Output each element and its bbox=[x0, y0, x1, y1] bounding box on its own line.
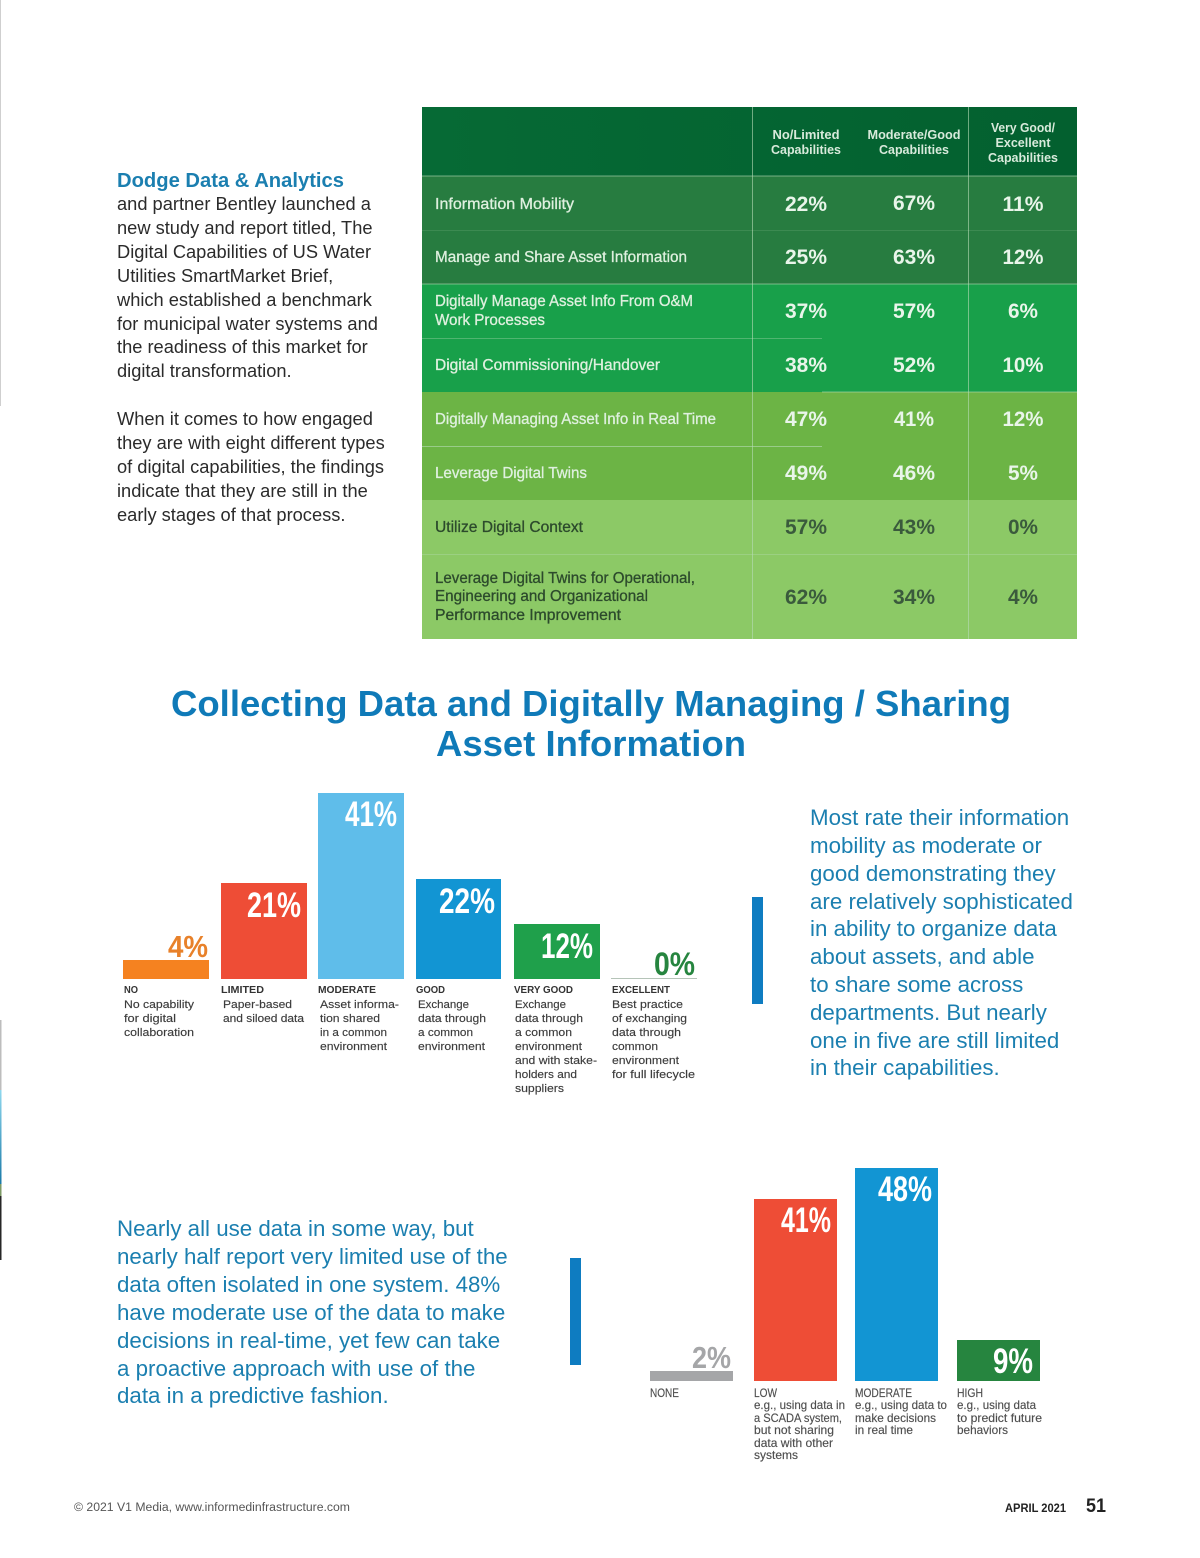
bar: Good 22%: GOOD bbox=[416, 984, 445, 996]
row: Information Mobility: 22% bbox=[785, 193, 827, 216]
bar: Moderate 41%: in a common bbox=[320, 1027, 387, 1039]
bar: Low 41%: but not sharing bbox=[754, 1423, 834, 1437]
bar: Good 22%: a common bbox=[418, 1027, 473, 1039]
row: Leverage Digital Twins for Operational: Leverage Digital Twins for Operational, bbox=[435, 570, 695, 587]
bar: Good 22%: Exchange bbox=[418, 999, 469, 1011]
callout: information mobility: are relatively sophisticated bbox=[810, 889, 1073, 914]
intro paragraph 2: they are with eight different types bbox=[117, 432, 385, 453]
bar: High 9%: e.g., using data bbox=[957, 1398, 1036, 1412]
main title: Asset Information bbox=[436, 723, 746, 764]
main title bbox=[171, 683, 1011, 764]
bar: None 2%: 2% bbox=[692, 1340, 731, 1375]
row: Manage and Share Asset Information: 12% bbox=[1002, 246, 1044, 269]
bar: Excellent 0%: 0% bbox=[654, 946, 695, 982]
intro paragraph 2 bbox=[117, 408, 385, 525]
bar: High 9% bbox=[957, 1340, 1042, 1437]
row: Digital Commissioning/Handover: 52% bbox=[893, 354, 935, 377]
bar: Excellent 0%: common bbox=[612, 1041, 658, 1053]
bar: No 4%: 4% bbox=[168, 929, 208, 964]
bar: Low 41%: systems bbox=[754, 1448, 798, 1462]
intro paragraph 1: and partner Bentley launched a bbox=[117, 193, 372, 214]
footer date: APRIL 2021 bbox=[1005, 1501, 1066, 1515]
bar: Low 41%: 41% bbox=[781, 1201, 831, 1240]
row: Leverage Digital Twins for Operational: 4% bbox=[1008, 586, 1038, 609]
bar: Moderate 48%: e.g., using data to bbox=[855, 1398, 947, 1412]
bar: High 9%: behaviors bbox=[957, 1423, 1008, 1437]
intro paragraph 1: digital transformation. bbox=[117, 360, 292, 381]
intro paragraph 2: of digital capabilities, the findings bbox=[117, 456, 384, 477]
row: Leverage Digital Twins for Operational bbox=[422, 554, 1077, 639]
row: Information Mobility: Information Mobility bbox=[435, 196, 574, 213]
row: Digital Commissioning/Handover: Digital Commissioning/Handover bbox=[435, 357, 660, 374]
row: Digitally Manage Asset Info: 6% bbox=[1008, 300, 1038, 323]
bar: Excellent 0%: of exchanging bbox=[612, 1013, 687, 1025]
row: Information Mobility bbox=[422, 176, 1077, 230]
table header row: Moderate/Good bbox=[868, 128, 960, 142]
row: Leverage Digital Twins for Operational: 62% bbox=[785, 586, 827, 609]
intro paragraph 1: Digital Capabilities of US Water bbox=[117, 241, 371, 262]
bar: High 9%: 9% bbox=[993, 1342, 1033, 1381]
bar: Low 41%: data with other bbox=[754, 1436, 833, 1450]
bar: Very Good 12%: holders and bbox=[515, 1069, 577, 1081]
callout: data use: Nearly all use data in some way, but bbox=[117, 1216, 475, 1241]
row: Manage and Share Asset Information: 25% bbox=[785, 246, 827, 269]
bar: No 4%: collaboration bbox=[124, 1027, 194, 1039]
intro paragraph 1: Utilities SmartMarket Brief, bbox=[117, 265, 333, 286]
row: Manage and Share Asset Information: Manage and Share Asset Information bbox=[435, 249, 687, 266]
callout: information mobility: in their capabilities. bbox=[810, 1055, 1000, 1080]
bar: No 4%: No capability bbox=[124, 999, 194, 1011]
table header row: Capabilities bbox=[879, 143, 949, 157]
row: Leverage Digital Twins for Operational: Engineering and Organizational bbox=[435, 588, 648, 605]
table header row: Excellent bbox=[996, 136, 1051, 150]
page edge strip bbox=[0, 0, 2, 1260]
bar: Moderate 41%: MODERATE bbox=[318, 984, 376, 996]
bar: Low 41%: e.g., using data in bbox=[754, 1398, 845, 1412]
bar: Very Good 12%: Exchange bbox=[515, 999, 566, 1011]
row: Digitally Manage Asset Info: 37% bbox=[785, 300, 827, 323]
callout: data use: have moderate use of the data to make bbox=[117, 1300, 505, 1325]
bar: Low 41%: a SCADA system, bbox=[754, 1411, 842, 1425]
bar: No 4% bbox=[123, 929, 209, 1039]
callout: information mobility: in ability to organize data bbox=[810, 916, 1057, 941]
bar: Excellent 0% bbox=[611, 946, 697, 1081]
bar: Excellent 0%: environment bbox=[612, 1055, 680, 1067]
bar chart: data use bbox=[650, 1168, 1042, 1462]
bar: Moderate 41% bbox=[318, 793, 404, 1053]
table header row: Very Good/ bbox=[991, 121, 1056, 135]
bar: Very Good 12%: environment bbox=[515, 1041, 583, 1053]
bar: Moderate 41%: 41% bbox=[345, 795, 397, 834]
table header row: No/Limited bbox=[772, 128, 840, 142]
callout: data use: data in a predictive fashion. bbox=[117, 1383, 389, 1408]
bar: Low 41%: LOW bbox=[754, 1386, 778, 1400]
row: Utilize Digital Context: 57% bbox=[785, 516, 827, 539]
bar: No 4%: for digital bbox=[124, 1013, 176, 1025]
bar: Moderate 48%: in real time bbox=[855, 1423, 913, 1437]
bar: Excellent 0%: data through bbox=[612, 1027, 681, 1039]
row: Utilize Digital Context: Utilize Digital Context bbox=[435, 519, 584, 536]
bar: Very Good 12%: and with stake- bbox=[515, 1055, 597, 1067]
bar: Good 22%: 22% bbox=[439, 882, 495, 921]
row: Leverage Digital Twins bbox=[422, 446, 1077, 500]
row: Digital Commissioning/Handover bbox=[422, 338, 1077, 392]
callout: information mobility: to share some across bbox=[810, 972, 1023, 997]
row: Manage and Share Asset Information bbox=[422, 230, 1077, 284]
row: Leverage Digital Twins: Leverage Digital Twins bbox=[435, 465, 587, 482]
row: Information Mobility: 67% bbox=[893, 192, 935, 215]
intro paragraph 2: indicate that they are still in the bbox=[117, 480, 368, 501]
row: Digitally Managing Asset Info in Real Time bbox=[422, 392, 1077, 446]
main title: Collecting Data and Digitally Managing / Sharing bbox=[171, 683, 1011, 724]
table header row: Capabilities bbox=[771, 143, 841, 157]
bar: Excellent 0%: EXCELLENT bbox=[612, 984, 671, 996]
bar: Good 22% bbox=[416, 879, 501, 1053]
bar: Excellent 0%: Best practice bbox=[612, 999, 683, 1011]
row: Manage and Share Asset Information: 63% bbox=[893, 246, 935, 269]
bar chart: information mobility bbox=[123, 793, 697, 1095]
bar: Low 41% bbox=[754, 1199, 845, 1462]
callout: data use bbox=[117, 1216, 508, 1408]
callout: information mobility: mobility as moderate or bbox=[810, 833, 1042, 858]
bar: None 2% bbox=[650, 1340, 733, 1400]
bar: Limited 21%: LIMITED bbox=[221, 984, 264, 996]
intro paragraph 1: the readiness of this market for bbox=[117, 336, 368, 357]
row: Utilize Digital Context: 43% bbox=[893, 516, 935, 539]
bar: Good 22%: data through bbox=[418, 1013, 486, 1025]
row: Digitally Managing Asset Info in Real Time: 47% bbox=[785, 408, 827, 431]
bar: Very Good 12%: data through bbox=[515, 1013, 583, 1025]
row: Digitally Manage Asset Info: Digitally Manage Asset Info From O&M bbox=[435, 293, 693, 310]
row: Information Mobility: 11% bbox=[1002, 193, 1044, 216]
callout: information mobility: Most rate their information bbox=[810, 805, 1069, 830]
bar: Moderate 41%: tion shared bbox=[320, 1013, 380, 1025]
bar: Limited 21%: Paper-based bbox=[223, 999, 292, 1011]
bar: No 4%: NO bbox=[124, 984, 138, 996]
callout: information mobility: about assets, and able bbox=[810, 944, 1035, 969]
bar: Very Good 12% bbox=[514, 924, 600, 1095]
row: Digitally Manage Asset Info: 57% bbox=[893, 300, 935, 323]
intro heading: Dodge Data & Analytics bbox=[117, 169, 344, 192]
intro paragraph 1: new study and report titled, The bbox=[117, 217, 373, 238]
table header row bbox=[422, 107, 1077, 176]
callout: data use: a proactive approach with use of the bbox=[117, 1356, 475, 1381]
callout: information mobility bbox=[810, 805, 1073, 1080]
footer copyright: © 2021 V1 Media, www.informedinfrastructure.com bbox=[74, 1502, 350, 1514]
bar: Very Good 12%: VERY GOOD bbox=[514, 984, 573, 996]
bar: Moderate 41%: Asset informa- bbox=[320, 999, 399, 1011]
intro paragraph 1: which established a benchmark bbox=[116, 289, 373, 310]
row: Digitally Managing Asset Info in Real Time: 12% bbox=[1002, 408, 1044, 431]
accent bar: bottom chart bbox=[570, 1258, 581, 1365]
intro text block bbox=[116, 169, 385, 525]
bar: Moderate 48% bbox=[855, 1168, 947, 1437]
bar: Moderate 48%: 48% bbox=[878, 1170, 932, 1209]
bar: Moderate 41%: environment bbox=[320, 1041, 388, 1053]
bar: Limited 21%: 21% bbox=[247, 886, 301, 925]
callout: information mobility: one in five are still limited bbox=[810, 1028, 1059, 1053]
table header row: Capabilities bbox=[988, 151, 1058, 165]
intro paragraph 1: for municipal water systems and bbox=[117, 313, 378, 334]
bar: None 2%: NONE bbox=[650, 1386, 679, 1400]
bar: Limited 21% bbox=[221, 883, 307, 1025]
row: Leverage Digital Twins for Operational: 34% bbox=[893, 586, 935, 609]
accent bar: top chart bbox=[752, 897, 763, 1004]
bar: Very Good 12%: 12% bbox=[541, 927, 593, 966]
row: Digital Commissioning/Handover: 10% bbox=[1002, 354, 1044, 377]
bar: High 9%: HIGH bbox=[957, 1386, 983, 1400]
intro paragraph 2: When it comes to how engaged bbox=[117, 408, 373, 429]
callout: information mobility: good demonstrating they bbox=[810, 861, 1056, 886]
bar: Very Good 12%: a common bbox=[515, 1027, 572, 1039]
bar: Moderate 48%: make decisions bbox=[855, 1411, 936, 1425]
page number: 51 bbox=[1086, 1496, 1106, 1517]
row: Leverage Digital Twins for Operational: Performance Improvement bbox=[435, 607, 622, 624]
row: Digitally Manage Asset Info bbox=[422, 284, 1077, 338]
bar: Moderate 48%: MODERATE bbox=[855, 1386, 912, 1400]
row: Digitally Managing Asset Info in Real Time: Digitally Managing Asset Info in Real Time bbox=[435, 411, 716, 428]
row: Utilize Digital Context bbox=[422, 500, 1077, 554]
callout: information mobility: departments. But nearly bbox=[810, 1000, 1048, 1025]
row: Leverage Digital Twins: 46% bbox=[893, 462, 935, 485]
row: Digitally Manage Asset Info: Work Processes bbox=[435, 312, 545, 329]
callout: data use: data often isolated in one system. 48% bbox=[117, 1272, 500, 1297]
row: Digitally Managing Asset Info in Real Time: 41% bbox=[894, 408, 934, 431]
intro paragraph 2: early stages of that process. bbox=[117, 504, 345, 525]
bar: High 9%: to predict future bbox=[957, 1411, 1042, 1425]
callout: data use: nearly half report very limited use of the bbox=[117, 1244, 508, 1269]
bar: Limited 21%: and siloed data bbox=[223, 1013, 305, 1025]
row: Digital Commissioning/Handover: 38% bbox=[785, 354, 827, 377]
row: Leverage Digital Twins: 49% bbox=[785, 462, 827, 485]
row: Leverage Digital Twins: 5% bbox=[1008, 462, 1038, 485]
intro paragraph 1 bbox=[116, 193, 378, 381]
bar: Very Good 12%: suppliers bbox=[515, 1083, 564, 1095]
bar: Good 22%: environment bbox=[418, 1041, 486, 1053]
row: Utilize Digital Context: 0% bbox=[1008, 516, 1038, 539]
bar: Excellent 0%: for full lifecycle bbox=[612, 1069, 695, 1081]
callout: data use: decisions in real-time, yet few can take bbox=[117, 1328, 500, 1353]
capabilities table bbox=[422, 107, 1077, 639]
